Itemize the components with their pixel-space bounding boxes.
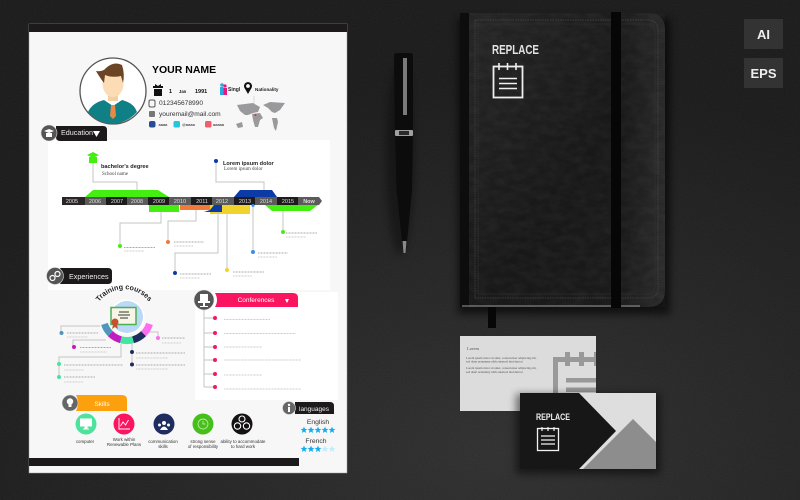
- heading: Conferences: [238, 297, 275, 304]
- skill: responsibility: of responsibility: [188, 444, 219, 449]
- year axis: 2015: [282, 199, 294, 205]
- marital status: Singl: [228, 87, 241, 93]
- social links: @aaaa: [182, 122, 196, 127]
- year axis: 2013: [239, 199, 251, 205]
- icon: graduation cap: [87, 152, 99, 163]
- skill: responsibility: strong sense: [190, 439, 216, 444]
- connectors: [59, 326, 158, 377]
- birth date: Jan: [179, 89, 187, 94]
- heading: experiences: Experiences: [69, 272, 109, 281]
- email: youremail@mail.com: [159, 111, 221, 118]
- format badge: EPS: EPS: [750, 66, 777, 81]
- skill: renewable plans: [107, 414, 142, 447]
- curved title: Training courses: [95, 286, 152, 301]
- marital status: [220, 83, 241, 95]
- education timeline: [62, 152, 322, 278]
- heading: education: Education: [61, 128, 93, 137]
- language: english: English: [307, 419, 329, 426]
- heading: experiences: [46, 268, 112, 284]
- conferences: [194, 290, 301, 389]
- business card: back: sed diam nonummy nibh euismod tincidunt ut: [466, 370, 523, 374]
- course entries: [57, 331, 185, 382]
- year axis: 2005: [66, 199, 78, 205]
- icon: notepad: [494, 63, 522, 98]
- lorem entry: [214, 159, 274, 172]
- list entries: [213, 316, 301, 389]
- business card: back: Lorem ipsum dolor sit amet, consectetuer adipiscing elit,: [466, 356, 537, 361]
- lorem entry: Lorem ipsum dolor: [224, 167, 263, 172]
- icon: notepad: [538, 427, 558, 450]
- heading: [62, 395, 127, 411]
- name: YOUR NAME: [152, 64, 216, 76]
- degree entry: School name: [102, 172, 129, 177]
- format badge: AI: [744, 19, 783, 49]
- card title: REPLACE: [536, 412, 570, 422]
- languages: [282, 402, 335, 452]
- year axis: [62, 197, 322, 205]
- world map: [236, 96, 285, 131]
- notebook: [458, 12, 670, 328]
- social links: aaaa: [158, 122, 168, 127]
- language: french: French: [305, 438, 327, 445]
- social links: [149, 121, 225, 128]
- social links: aaaaa: [213, 122, 225, 127]
- birth date: 1: [169, 89, 172, 95]
- format badge: AI: AI: [757, 27, 770, 42]
- heading: education: [41, 125, 107, 141]
- business card: back: Lorem: [467, 346, 479, 351]
- milestone entries: [118, 204, 317, 278]
- skill: renewable plans: Renewable Plans: [107, 442, 142, 447]
- format badge: EPS: [744, 58, 783, 88]
- heading: Skills: [94, 401, 110, 408]
- year axis: 2008: [131, 199, 143, 205]
- bar: top periods: [85, 190, 169, 197]
- nationality: Nationality: [255, 87, 279, 92]
- skills: [62, 395, 266, 449]
- training courses: [57, 286, 185, 382]
- notebook title: REPLACE: [492, 43, 539, 57]
- skill: hard work: [221, 414, 266, 449]
- year axis: 2007: [111, 199, 123, 205]
- year axis: Now: [303, 199, 316, 205]
- heading: languages: [299, 406, 330, 413]
- connectors: [93, 161, 283, 273]
- business card: back: [460, 336, 596, 411]
- birth date: [153, 84, 207, 96]
- skill: computer: computer: [76, 439, 95, 444]
- year axis: 2014: [260, 199, 272, 205]
- degree entry: bachelor's degree: [101, 164, 149, 170]
- icon: large notepad: [553, 352, 596, 393]
- skill: communication: skills: [158, 444, 169, 449]
- year axis: 2012: [216, 199, 228, 205]
- nationality: [244, 82, 279, 94]
- elastic band: [611, 12, 621, 308]
- business card: back: sed diam nonummy nibh euismod tincidunt ut: [466, 360, 523, 364]
- business card: front: [516, 393, 660, 474]
- ribbon: [488, 307, 496, 328]
- skill: renewable plans: Work within: [113, 437, 136, 442]
- degree entry: [101, 164, 149, 177]
- profile portrait: [80, 58, 146, 124]
- icon: gift: [153, 84, 163, 96]
- skill: communication: communication: [148, 439, 178, 444]
- skill: hard work: to hard work: [231, 444, 256, 449]
- skill: responsibility: [188, 414, 219, 449]
- icon: certificate: [110, 300, 144, 334]
- pen: [386, 53, 414, 255]
- bar: lower periods: [149, 205, 318, 214]
- birth date: 1991: [195, 89, 207, 95]
- resume page: [28, 24, 348, 474]
- year axis: 2010: [174, 199, 186, 205]
- business card: back: Lorem ipsum dolor sit amet, consectetuer adipiscing elit,: [466, 366, 537, 371]
- phone: 012345678990: [159, 100, 203, 107]
- skill: communication: [148, 414, 178, 449]
- skill: computer: [76, 414, 96, 444]
- year axis: 2006: [89, 199, 101, 205]
- ring segments: [104, 324, 150, 341]
- year axis: 2011: [196, 199, 208, 205]
- year axis: 2009: [153, 199, 165, 205]
- skill: hard work: ability to accommodate: [221, 439, 266, 444]
- lorem entry: Lorem ipsum dolor: [223, 161, 274, 167]
- list: [204, 310, 215, 387]
